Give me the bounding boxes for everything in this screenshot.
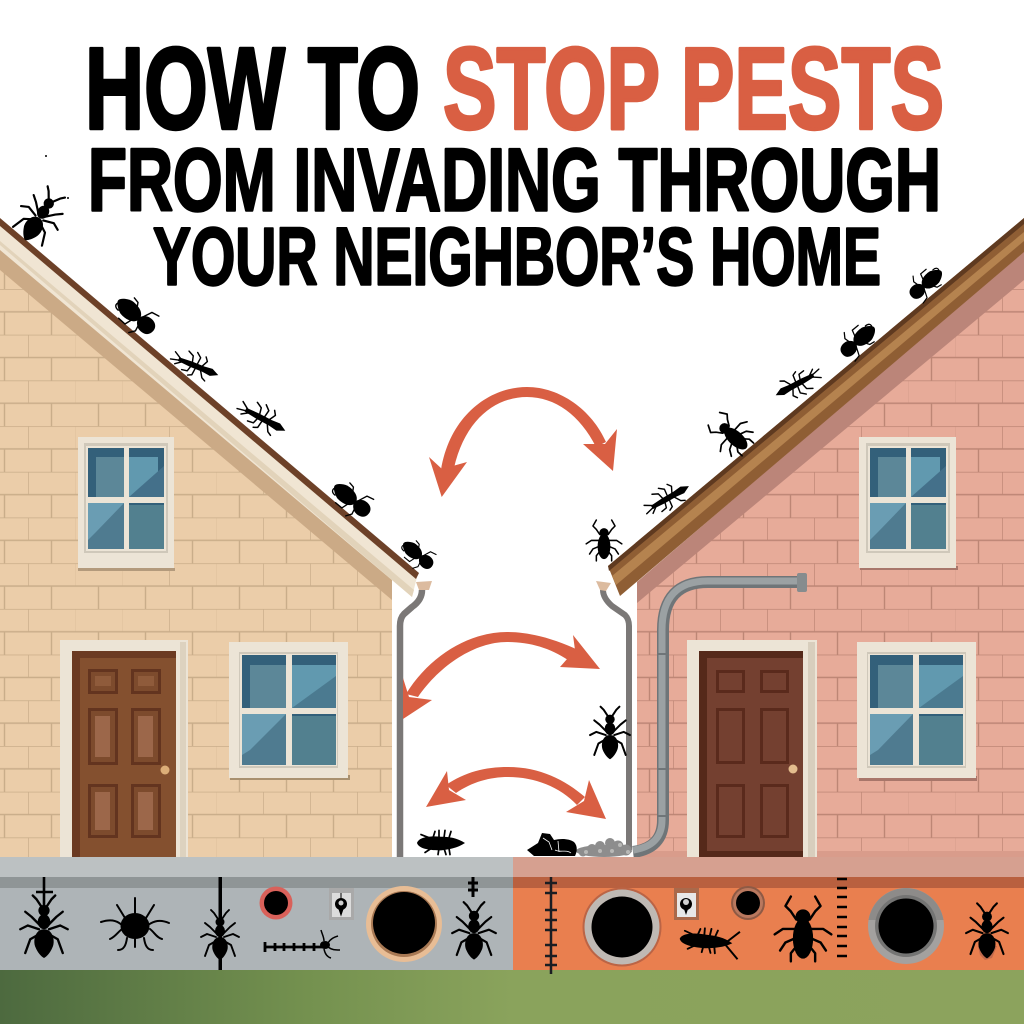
bug 2 (107, 289, 163, 344)
small dark ringed hole (731, 886, 765, 920)
right downspout (596, 581, 629, 850)
bug 3 (770, 362, 826, 407)
steel ringed hole (868, 888, 944, 964)
foundation: right orange (513, 857, 1024, 974)
right roof edge (608, 218, 1024, 571)
crushed bug on ground (527, 833, 577, 856)
foundation ant with probe (20, 877, 68, 958)
specks (45, 155, 69, 199)
left roof fascia (0, 225, 417, 597)
bug 5 (639, 475, 695, 521)
arrow: top (429, 387, 617, 497)
gravel pile (576, 838, 632, 857)
house: right pink (608, 218, 1024, 858)
ladder crack with bug (265, 930, 340, 958)
bug 4 (701, 404, 761, 464)
bug 1 (7, 180, 75, 252)
grey keyhole box (329, 888, 354, 920)
pest on right downspout (590, 707, 630, 759)
large foundation beetle (775, 897, 831, 961)
foundation bug on vertical crack (201, 877, 239, 970)
bug 3 (167, 344, 223, 386)
bug with stain (966, 903, 1008, 960)
foundation beetle with ticks (452, 877, 496, 960)
arrow: bottom (426, 767, 606, 819)
bug 1 (902, 260, 950, 306)
wall conduit pipe (633, 573, 807, 852)
pests on right roof (586, 260, 950, 561)
left downspout (400, 581, 432, 857)
left door with frame (60, 640, 188, 858)
foundation spider (101, 898, 169, 950)
bug 2 (833, 316, 883, 365)
right roof shadow (637, 250, 1024, 603)
grass (0, 970, 1024, 1024)
arrow: middle (403, 632, 600, 719)
horizontal beetle (678, 926, 740, 959)
right brick wall (637, 250, 1024, 858)
left roof shadow (0, 245, 392, 600)
left roof edge (0, 218, 419, 579)
right lower window (857, 642, 977, 781)
tick marks (837, 879, 847, 956)
door knob (160, 766, 170, 774)
bug 5 (324, 475, 378, 526)
left brick wall (0, 245, 392, 858)
foundation: left grey (0, 857, 513, 970)
left upper window (78, 437, 175, 571)
title line 1 (85, 24, 944, 154)
bug 4 (233, 394, 292, 441)
stitched crack left (545, 877, 557, 974)
grey ringed hole (582, 888, 662, 966)
right upper window (859, 437, 958, 570)
pests on left roof (7, 180, 440, 577)
house: left beige (0, 218, 419, 858)
left lower window (229, 642, 350, 780)
red ringed hole (260, 886, 292, 920)
door knob (788, 764, 798, 774)
bug 6 (586, 520, 622, 561)
tan ringed large hole (366, 886, 442, 962)
right roof wood fascia (608, 218, 1024, 596)
termite on ground (417, 830, 465, 855)
right door with frame (687, 640, 817, 858)
title (85, 24, 944, 302)
title line 1: HOW TO (85, 24, 420, 154)
bug 6 (395, 534, 440, 577)
keyhole box (674, 888, 699, 920)
